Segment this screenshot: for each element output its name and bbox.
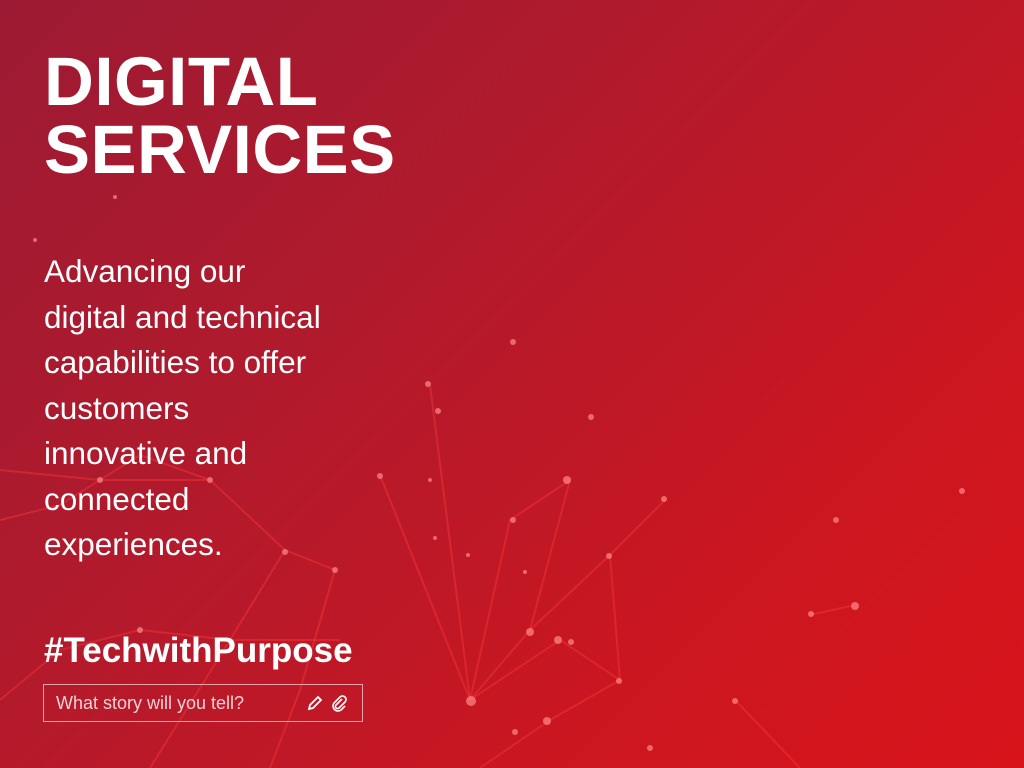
description text: connected xyxy=(44,480,189,516)
title: DIGITAL xyxy=(44,43,318,120)
icon: pencil xyxy=(308,696,322,710)
description text: customers xyxy=(44,390,189,426)
description text: Advancing our xyxy=(44,253,245,289)
hashtag: #TechwithPurpose xyxy=(44,631,353,670)
input box xyxy=(43,684,363,722)
icon: paperclip xyxy=(332,695,347,712)
description text: digital and technical xyxy=(44,298,321,334)
description text: capabilities to offer xyxy=(44,344,306,380)
description text: innovative and xyxy=(44,435,247,471)
description text xyxy=(44,253,321,562)
title: SERVICES xyxy=(44,111,396,188)
title xyxy=(44,43,396,188)
placeholder text: What story will you tell? xyxy=(56,693,244,713)
description text: experiences. xyxy=(44,526,223,562)
